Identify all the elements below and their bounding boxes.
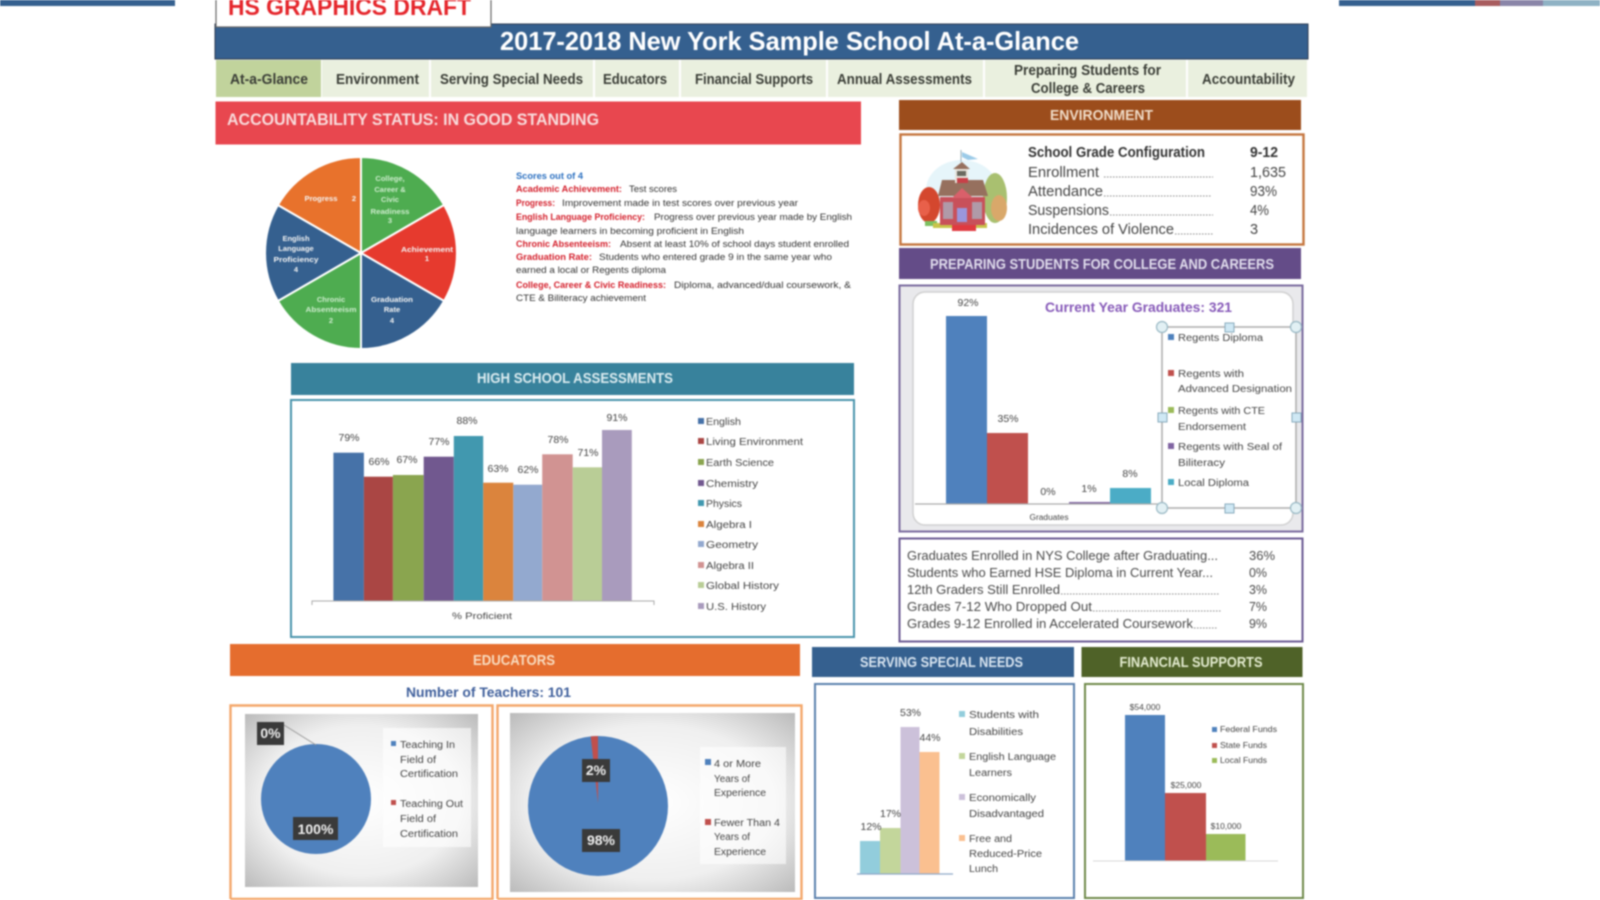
tab: At-a-Glance: At-a-Glance xyxy=(230,72,308,88)
heading: financial supports: FINANCIAL SUPPORTS xyxy=(1120,654,1262,671)
legend: funds: Local Funds xyxy=(1220,755,1267,765)
tab: Environment: Environment xyxy=(336,72,419,88)
legend: special needs: Reduced-Price xyxy=(969,849,1042,860)
legend: special needs: English Language xyxy=(969,752,1056,763)
legend: special needs: Disadvantaged xyxy=(969,809,1044,820)
legend: assessments: U.S. History xyxy=(706,602,766,613)
panel: college and career statistics xyxy=(900,538,1302,642)
legend: assessments: English xyxy=(706,417,741,428)
heading: financial supports xyxy=(1082,647,1302,677)
legend: assessments: Geometry xyxy=(706,540,758,551)
accountability key text: Progress: xyxy=(516,198,555,208)
title bar: 2017-2018 New York Sample School At-a-Glance xyxy=(500,26,1079,56)
legend: graduates with selection box: Regents with xyxy=(1178,369,1244,380)
legend: graduates with selection box: Biliteracy xyxy=(1178,458,1225,469)
bar chart: special needs: 53% xyxy=(900,707,921,719)
accountability status banner: ACCOUNTABILITY STATUS: IN GOOD STANDING xyxy=(227,110,599,129)
accountability pie chart: Proficiency xyxy=(274,255,319,264)
accountability pie chart: 2 xyxy=(352,194,356,203)
bar chart: assessment proficiency: 77% xyxy=(428,436,450,448)
legend: graduates with selection box xyxy=(1156,322,1302,514)
heading: preparing students xyxy=(899,248,1301,279)
legend: funds: State Funds xyxy=(1220,740,1267,750)
environment stats: Attendance xyxy=(1028,184,1103,200)
accountability pie chart: Rate xyxy=(384,305,400,314)
legend: graduates with selection box: Regents with Seal of xyxy=(1178,442,1282,453)
panel: environment xyxy=(900,134,1304,244)
legend: experience: Years of xyxy=(714,774,750,785)
legend: experience: Years of xyxy=(714,832,750,843)
accountability pie chart: Career & xyxy=(374,185,406,194)
legend: special needs: Free and xyxy=(969,834,1012,845)
bar chart: graduates: 35% xyxy=(997,413,1019,425)
legend: special needs: Learners xyxy=(969,768,1012,779)
tab: Accountability xyxy=(1188,60,1307,97)
legend: experience: Fewer Than 4 xyxy=(714,818,780,829)
accountability key text: College, Career & Civic Readiness: xyxy=(516,280,666,290)
tab: Environment xyxy=(322,60,429,97)
environment stats: School Grade Configuration xyxy=(1028,145,1205,161)
pie chart: certification: 0% xyxy=(260,725,281,741)
heading: educators: EDUCATORS xyxy=(473,652,555,669)
bar chart: graduates: Graduates xyxy=(1030,513,1068,522)
accountability key text: English Language Proficiency: xyxy=(516,212,645,222)
bar chart: assessment proficiency: 91% xyxy=(606,412,628,424)
tab: Financial Supports xyxy=(681,60,826,97)
accountability pie chart xyxy=(265,157,457,349)
environment stats xyxy=(1028,145,1286,238)
legend: experience xyxy=(700,747,786,864)
accountability pie chart: College, xyxy=(375,174,405,183)
bar chart: special needs: 12% xyxy=(860,821,882,833)
panel: teachers experience xyxy=(498,706,802,899)
bar chart: funds: $25,000 xyxy=(1171,780,1202,790)
pie chart: certification: 100% xyxy=(298,821,334,837)
accountability pie chart: 1 xyxy=(425,254,429,263)
accountability pie chart: 4 xyxy=(390,316,395,325)
legend: special needs: Disabilities xyxy=(969,727,1023,738)
panel: college and career statistics: 36% xyxy=(1249,549,1275,563)
heading: high school assessments: HIGH SCHOOL ASSESSMENTS xyxy=(477,370,673,387)
bar chart: graduates: 8% xyxy=(1122,468,1138,480)
panel: college and career statistics: Graduates Enrolled in NYS College after Graduating... xyxy=(907,549,1218,563)
tab: At-a-Glance xyxy=(216,60,321,97)
environment stats: Enrollment xyxy=(1028,165,1099,181)
bar chart: graduates: 92% xyxy=(957,297,979,309)
bar chart: assessment proficiency: 62% xyxy=(517,464,539,476)
heading: serving special needs: SERVING SPECIAL NEEDS xyxy=(860,654,1023,671)
bar chart: special needs: 17% xyxy=(880,808,901,820)
accountability key text: Students who entered grade 9 in the same year who xyxy=(599,252,832,262)
accountability pie chart: Language xyxy=(278,244,314,253)
heading: serving special needs xyxy=(812,647,1074,677)
tab: Serving Special Needs: Serving Special Needs xyxy=(440,72,583,88)
bar chart: assessment proficiency: 78% xyxy=(547,434,569,446)
navigation tabs xyxy=(216,60,1307,97)
legend: assessments: Chemistry xyxy=(706,479,758,490)
tab: Preparing Students xyxy=(985,60,1186,97)
accountability key text: Chronic Absenteeism: xyxy=(516,239,611,249)
legend: graduates with selection box: Advanced Designation xyxy=(1178,384,1292,395)
bar chart: assessment proficiency: 66% xyxy=(368,456,390,468)
accountability pie chart: 2 xyxy=(329,316,333,325)
accountability status banner xyxy=(216,102,861,144)
legend: special needs: Lunch xyxy=(969,864,998,875)
panel: college and career statistics: 7% xyxy=(1249,600,1267,614)
bar chart: assessment proficiency: 67% xyxy=(396,454,418,466)
accountability key text: Improvement made in test scores over previous year xyxy=(562,198,798,208)
accountability key text: Academic Achievement: xyxy=(516,184,622,194)
environment stats: Incidences of Violence xyxy=(1028,222,1174,238)
accountability pie chart: 4 xyxy=(294,265,299,274)
legend: assessments: Living Environment xyxy=(706,437,803,448)
legend: assessments: Algebra II xyxy=(706,561,754,572)
environment stats: 4% xyxy=(1250,203,1269,219)
bar chart: graduates xyxy=(915,297,1183,522)
legend: assessments xyxy=(698,417,803,613)
tab: Annual Assessments: Annual Assessments xyxy=(837,72,972,88)
legend: graduates with selection box: Regents with CTE xyxy=(1178,406,1265,417)
environment stats: Suspensions xyxy=(1028,203,1109,219)
legend: special needs xyxy=(959,710,1056,875)
heading: educators xyxy=(230,644,800,676)
legend: funds: Federal Funds xyxy=(1220,724,1277,734)
tab: Preparing Students: Preparing Students for xyxy=(1014,63,1161,79)
pie chart: experience xyxy=(528,736,668,876)
heading: environment xyxy=(899,100,1301,130)
legend: experience: Experience xyxy=(714,788,766,799)
panel: college and career statistics: 12th Graders Still Enrolled xyxy=(907,583,1060,597)
bar chart: special needs xyxy=(857,707,953,874)
tab: Annual Assessments xyxy=(828,60,983,97)
panel: serving special needs xyxy=(815,684,1074,898)
bar chart: funds: $54,000 xyxy=(1130,702,1161,712)
heading: preparing students: PREPARING STUDENTS FOR COLLEGE AND CAREERS xyxy=(930,256,1274,273)
bar chart: assessment proficiency: 79% xyxy=(338,432,360,444)
legend: certification: Certification xyxy=(400,829,458,840)
heading: high school assessments xyxy=(291,363,854,395)
bar chart: special needs: 44% xyxy=(919,732,941,744)
bar chart: funds xyxy=(1093,702,1278,861)
environment stats: 1,635 xyxy=(1250,165,1286,181)
top right accent bar xyxy=(1339,0,1600,6)
legend: experience: 4 or More xyxy=(714,759,761,770)
bar chart: funds: $10,000 xyxy=(1211,821,1242,831)
pie chart: experience: 98% xyxy=(587,832,616,848)
accountability pie chart: Graduation xyxy=(371,295,413,304)
title bar xyxy=(215,24,1308,59)
legend: certification xyxy=(383,728,471,847)
legend: graduates with selection box: Local Diploma xyxy=(1178,478,1249,489)
panel: college and career statistics: 9% xyxy=(1249,617,1267,631)
bar chart: assessment proficiency: % Proficient xyxy=(452,611,513,621)
panel: teachers in field of certification xyxy=(230,706,492,899)
accountability pie chart: Civic xyxy=(381,195,399,204)
accountability pie chart: Progress xyxy=(304,194,338,203)
tab: Preparing Students: College & Careers xyxy=(1031,81,1145,97)
legend: certification: Field of xyxy=(400,814,436,825)
tab: Educators: Educators xyxy=(603,72,667,88)
panel: college and career statistics: Grades 9-12 Enrolled in Accelerated Coursework xyxy=(907,617,1194,631)
bar chart: assessment proficiency: 88% xyxy=(456,415,478,427)
panel: high school assessments chart xyxy=(291,400,854,637)
accountability key text: CTE & Biliteracy achievement xyxy=(516,293,647,303)
accountability pie chart: Absenteeism xyxy=(306,305,357,314)
accountability pie chart: Achievement xyxy=(401,245,454,254)
icon: schoolhouse xyxy=(918,150,1007,231)
tab: Accountability: Accountability xyxy=(1202,72,1295,88)
tab: Educators xyxy=(595,60,679,97)
legend: assessments: Algebra I xyxy=(706,520,752,531)
accountability key text: Progress over previous year made by English xyxy=(654,212,852,222)
panel: college and career statistics: 0% xyxy=(1249,566,1267,580)
accountability key text: earned a local or Regents diploma xyxy=(516,265,666,275)
chart title: Current Year Graduates: 321 xyxy=(1045,299,1232,315)
pie chart: certification xyxy=(257,722,371,854)
accountability key text xyxy=(516,171,852,303)
accountability key text: Absent at least 10% of school days student enrolled xyxy=(620,239,849,249)
panel: college and career statistics: Grades 7-12 Who Dropped Out xyxy=(907,600,1093,614)
top left accent bar xyxy=(0,0,175,6)
legend: graduates with selection box: Endorsement xyxy=(1178,422,1246,433)
legend: experience: Experience xyxy=(714,847,766,858)
accountability key text: Diploma, advanced/dual coursework, & xyxy=(674,280,851,290)
bar chart: assessment proficiency xyxy=(312,412,654,621)
accountability key text: Test scores xyxy=(629,184,678,194)
environment stats: 9-12 xyxy=(1250,145,1278,161)
legend: certification: Teaching Out xyxy=(400,799,463,810)
pie chart: experience: 2% xyxy=(586,762,607,778)
legend: certification: Field of xyxy=(400,755,436,766)
legend: certification: Teaching In xyxy=(400,740,455,751)
accountability key text: Scores out of 4 xyxy=(516,171,583,181)
tab: Serving Special Needs xyxy=(431,60,593,97)
legend: assessments: Earth Science xyxy=(706,458,774,469)
accountability pie chart: 3 xyxy=(388,216,392,225)
bar chart: assessment proficiency: 71% xyxy=(577,447,599,459)
legend: funds xyxy=(1212,724,1277,765)
bar chart: assessment proficiency: 63% xyxy=(487,463,509,475)
heading: environment: ENVIRONMENT xyxy=(1050,107,1153,124)
legend: special needs: Economically xyxy=(969,793,1036,804)
panel: financial supports xyxy=(1085,684,1303,898)
bar chart: graduates: 0% xyxy=(1040,486,1056,498)
panel: graduates chart xyxy=(900,286,1302,532)
accountability pie chart: English xyxy=(282,234,310,243)
panel: college and career statistics: Students who Earned HSE Diploma in Current Year... xyxy=(907,566,1213,580)
legend: assessments: Global History xyxy=(706,581,779,592)
legend: assessments: Physics xyxy=(706,499,742,510)
accountability pie chart: Chronic xyxy=(317,295,345,304)
environment stats: 93% xyxy=(1250,184,1277,200)
panel: college and career statistics: 3% xyxy=(1249,583,1267,597)
accountability key text: Graduation Rate: xyxy=(516,252,592,262)
number of teachers: Number of Teachers: 101 xyxy=(406,684,571,700)
legend: certification: Certification xyxy=(400,769,458,780)
bar chart: graduates: 1% xyxy=(1081,483,1097,495)
tab: Financial Supports: Financial Supports xyxy=(695,72,813,88)
environment stats: 3 xyxy=(1250,222,1258,238)
accountability key text: language learners in becoming proficient in English xyxy=(516,226,744,236)
legend: graduates with selection box: Regents Diploma xyxy=(1178,333,1263,344)
accountability pie chart: Readiness xyxy=(370,207,410,216)
legend: special needs: Students with xyxy=(969,710,1039,721)
